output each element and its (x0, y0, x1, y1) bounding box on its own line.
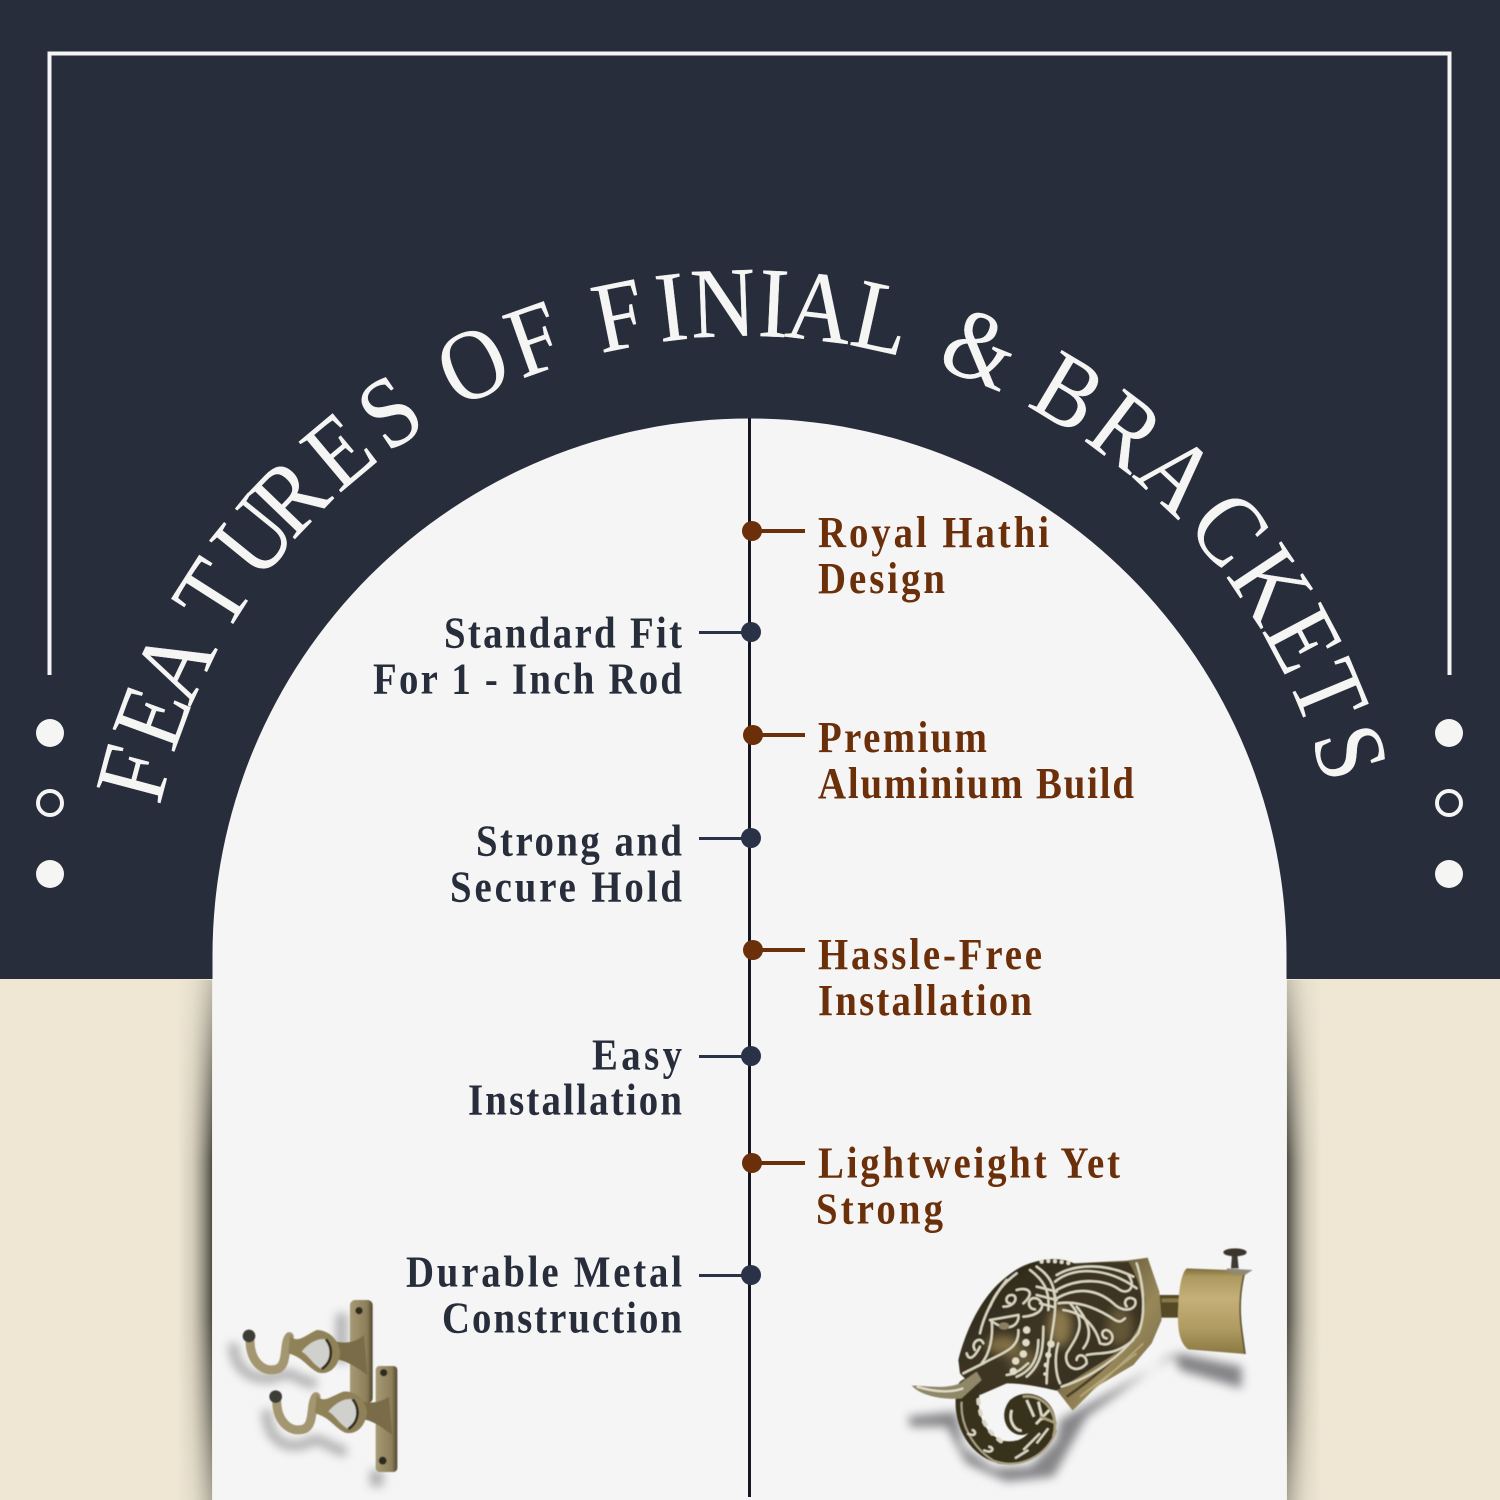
feature: Easy Installation: Installation (468, 1076, 682, 1125)
feature: Lightweight Yet Strong: Strong (816, 1185, 943, 1234)
feature: Hassle-Free Installation: Hassle-Free (818, 931, 1042, 980)
feature: Premium Aluminium Build: Aluminium Build (818, 759, 1134, 809)
cup (1178, 1268, 1245, 1354)
title: A (109, 610, 238, 717)
upper bracket (243, 1300, 373, 1403)
title: E (1242, 589, 1366, 689)
title: N (688, 246, 757, 360)
arch shadows (178, 980, 1321, 1500)
feature: Strong and Secure Hold: Secure Hold (450, 863, 682, 912)
feature: Hassle-Free Installation: Installation (818, 976, 1032, 1026)
icon: curtain brackets (233, 1300, 397, 1487)
feature: Royal Hathi Design: Royal Hathi (818, 509, 1049, 558)
feature: Standard Fit For 1-Inch Rod: Standard Fit (444, 609, 682, 658)
title: U (190, 477, 317, 597)
feature: Strong and Secure Hold: Strong and (476, 817, 682, 866)
feature: Easy Installation: Easy (592, 1031, 682, 1080)
white frame line (50, 54, 1450, 675)
beige lower band (0, 979, 1500, 1500)
title: E (89, 672, 213, 762)
feature: Easy Installation (468, 1031, 761, 1125)
arch panel (212, 419, 1286, 1500)
lower bracket (269, 1366, 397, 1472)
title: B (1015, 328, 1123, 455)
screw (1231, 1255, 1239, 1268)
feature: Standard Fit For 1-Inch Rod (373, 609, 761, 704)
title: T (1267, 645, 1391, 739)
engraved swirls (963, 1263, 1143, 1387)
feature: Premium Aluminium Build (743, 714, 1134, 809)
feature: Royal Hathi Design (742, 509, 1049, 604)
trunk (967, 1390, 1044, 1453)
title: F (492, 278, 576, 400)
center timeline (748, 418, 751, 1497)
feature: Lightweight Yet Strong (742, 1139, 1120, 1234)
title: A (781, 248, 859, 366)
title: I (650, 250, 693, 364)
feature: Durable Metal Construction: Construction (442, 1294, 682, 1343)
title: K (1207, 526, 1336, 642)
title: L (843, 257, 921, 378)
title (73, 246, 1411, 812)
title: F (583, 255, 655, 375)
feature: Hassle-Free Installation (743, 931, 1042, 1026)
title: O (419, 300, 526, 428)
head (958, 1259, 1143, 1395)
feature: Royal Hathi Design: Design (818, 554, 945, 604)
feature: Durable Metal Construction: Durable Metal (406, 1248, 682, 1297)
tusk (912, 1372, 982, 1399)
feature: Standard Fit For 1-Inch Rod: For 1 - Inch Rod (373, 655, 682, 704)
title: & (928, 283, 1034, 413)
head highlights (987, 1307, 1133, 1372)
icon: elephant finial (908, 1248, 1253, 1482)
right dots (1435, 719, 1463, 888)
ear plate (1057, 1258, 1162, 1411)
title: C (1168, 470, 1292, 587)
navy background (0, 0, 1500, 980)
feature: Strong and Secure Hold (450, 817, 761, 912)
title: E (281, 390, 395, 511)
title: F (73, 735, 194, 812)
title: R (1069, 368, 1185, 493)
rod (1158, 1295, 1183, 1318)
left dots (36, 719, 64, 888)
title: T (150, 541, 274, 647)
title: R (228, 436, 350, 557)
feature: Durable Metal Construction (406, 1248, 761, 1343)
title: S (337, 352, 441, 472)
feature: Premium Aluminium Build: Premium (818, 714, 987, 763)
title: S (1290, 712, 1411, 792)
title: I (756, 247, 791, 359)
title: A (1116, 411, 1240, 537)
feature: Lightweight Yet Strong: Lightweight Yet (818, 1139, 1120, 1188)
